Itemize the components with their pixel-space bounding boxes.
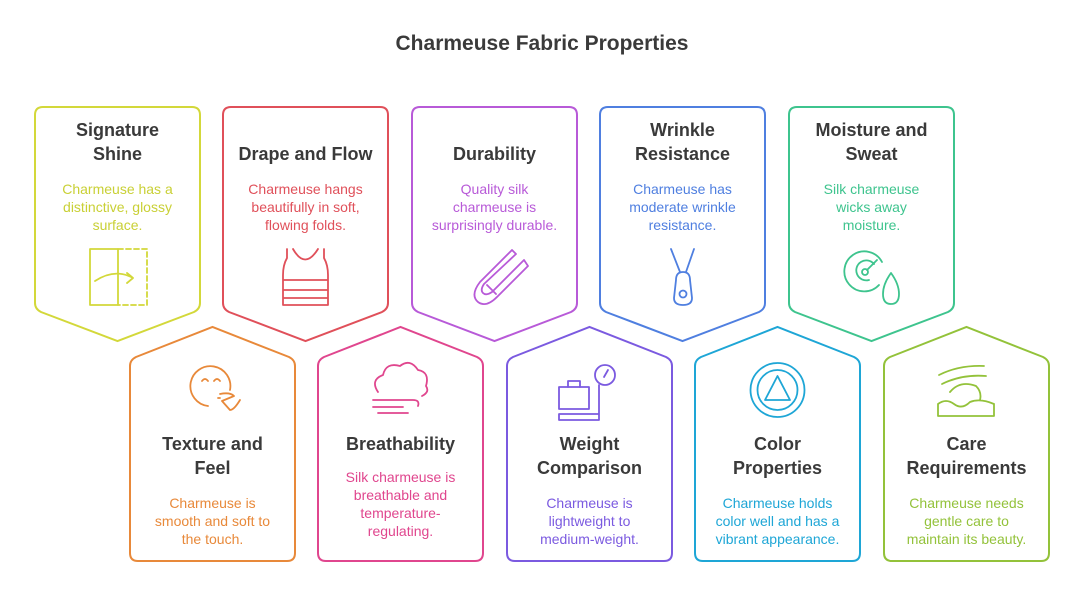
card: Texture and Feel: Texture and (162, 434, 263, 454)
card: Moisture and Sweat: moisture. (843, 217, 900, 233)
icon: thread snips (474, 250, 528, 304)
card: Breathability (318, 327, 483, 561)
icon: face (190, 366, 240, 410)
card: Breathability: regulating. (368, 523, 433, 539)
card: Durability: Durability (453, 144, 536, 164)
card: Signature Shine: distinctive, glossy (63, 199, 172, 215)
card: Wrinkle Resistance (600, 107, 765, 341)
card: Breathability: breathable and (354, 487, 447, 503)
title: Charmeuse Fabric Properties (396, 32, 688, 55)
card: Color Properties: Properties (733, 458, 822, 478)
card: Signature Shine: Shine (93, 144, 142, 164)
card: Texture and Feel: the touch. (182, 531, 243, 547)
card: Breathability: Breathability (346, 434, 455, 454)
card: Signature Shine: surface. (93, 217, 142, 233)
icon: fold (90, 249, 147, 305)
card: Durability: Quality silk (461, 181, 529, 197)
card: Durability: charmeuse is (453, 199, 536, 215)
card: Care Requirements: gentle care to (924, 513, 1009, 529)
card: Care Requirements: Charmeuse needs (909, 495, 1024, 511)
card: Moisture and Sweat: Moisture and (815, 120, 928, 140)
card: Signature Shine: Signature (76, 120, 159, 140)
icon: luggage scale (559, 365, 615, 420)
card: Drape and Flow: flowing folds. (265, 217, 346, 233)
card: Drape and Flow (223, 107, 388, 341)
card: Moisture and Sweat: Silk charmeuse (824, 181, 920, 197)
icon: color wheel (750, 363, 804, 417)
card: Weight Comparison: lightweight to (549, 513, 631, 529)
card: Weight Comparison: medium-weight. (540, 531, 639, 547)
card: Color Properties: vibrant appearance. (716, 531, 839, 547)
card: Wrinkle Resistance: Wrinkle (650, 120, 715, 140)
card: Wrinkle Resistance: resistance. (649, 217, 716, 233)
card: Drape and Flow: Drape and Flow (238, 144, 374, 164)
card: Moisture and Sweat (789, 107, 954, 341)
card: Weight Comparison: Comparison (537, 458, 642, 478)
card: Wrinkle Resistance: Charmeuse has (633, 181, 732, 197)
card: Breathability: temperature- (360, 505, 441, 521)
card: Care Requirements: maintain its beauty. (907, 531, 1026, 547)
card: Moisture and Sweat: Sweat (845, 144, 898, 164)
card: Care Requirements: Requirements (906, 458, 1027, 478)
card: Signature Shine (35, 107, 200, 341)
card: Drape and Flow: Charmeuse hangs (248, 181, 363, 197)
card: Color Properties: Charmeuse holds (723, 495, 832, 511)
card: Weight Comparison: Charmeuse is (546, 495, 633, 511)
card: Durability: surprisingly durable. (432, 217, 557, 233)
card: Care Requirements: Care (946, 434, 987, 454)
card: Color Properties: color well and has a (716, 513, 840, 529)
card: Drape and Flow: beautifully in soft, (251, 199, 360, 215)
card: Texture and Feel: Feel (194, 458, 231, 478)
card: Care Requirements (884, 327, 1049, 561)
card: Texture and Feel: smooth and soft to (155, 513, 270, 529)
card: Wrinkle Resistance: moderate wrinkle (629, 199, 736, 215)
icon: zipper (671, 249, 694, 305)
card: Moisture and Sweat: wicks away (835, 199, 907, 215)
card: Color Properties: Color (754, 434, 801, 454)
card: Durability (412, 107, 577, 341)
icon: hand on fabric (938, 366, 994, 416)
card: Breathability: Silk charmeuse is (346, 469, 455, 485)
card: Texture and Feel: Charmeuse is (169, 495, 256, 511)
card: Weight Comparison: Weight (560, 434, 619, 454)
card: Weight Comparison (507, 327, 672, 561)
card: Wrinkle Resistance: Resistance (635, 144, 730, 164)
card: Signature Shine: Charmeuse has a (62, 181, 173, 197)
icon: tank top (283, 249, 328, 305)
icon: cloud wind (373, 363, 427, 413)
card: Color Properties (695, 327, 860, 561)
card: Texture and Feel (130, 327, 295, 561)
icon: gauge and drop (844, 251, 899, 304)
